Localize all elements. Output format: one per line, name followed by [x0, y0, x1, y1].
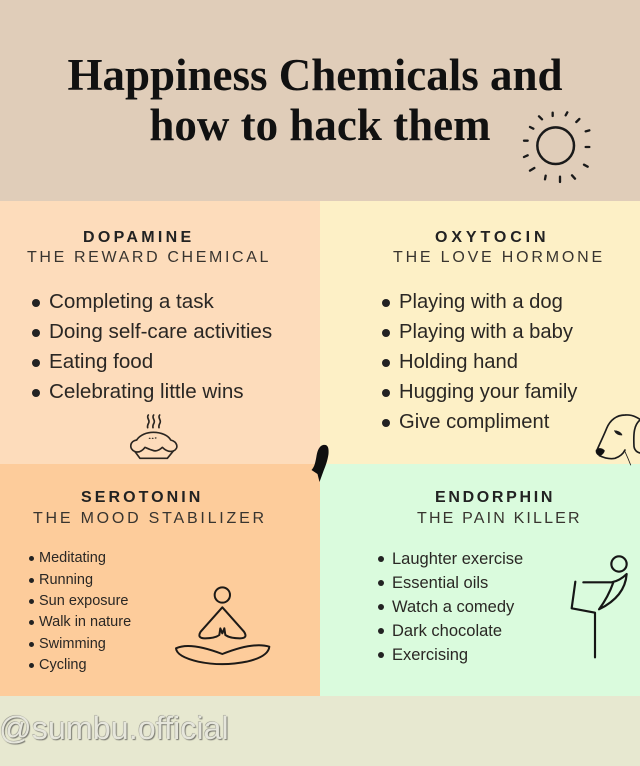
footer band — [0, 696, 640, 766]
watermark: @sumbu.official — [0, 710, 229, 746]
list: oxytocin: Playing with a dog — [399, 291, 563, 313]
list: oxytocin: Hugging your family — [399, 381, 577, 403]
list: oxytocin: Playing with a baby — [399, 321, 573, 343]
list: endorphin: Watch a comedy — [392, 598, 514, 616]
list: serotonin: Meditating — [39, 550, 106, 566]
list: serotonin: Sun exposure — [39, 593, 128, 609]
list: serotonin: Swimming — [39, 636, 106, 652]
list: endorphin: Dark chocolate — [392, 622, 502, 640]
list: serotonin: Cycling — [39, 657, 87, 673]
panel: serotonin — [0, 464, 320, 696]
list: oxytocin: Holding hand — [399, 351, 518, 373]
panel: dopamine — [0, 201, 320, 464]
list: endorphin: Laughter exercise — [392, 550, 523, 568]
panel: endorphin — [320, 464, 640, 696]
icon: dog — [596, 414, 640, 466]
list: serotonin — [29, 550, 131, 673]
icon: pie — [130, 414, 178, 460]
list: endorphin — [378, 550, 523, 664]
icon: meditation — [175, 586, 270, 666]
subheading: serotonin: THE MOOD STABILIZER — [33, 510, 267, 527]
list: dopamine: Eating food — [49, 350, 153, 373]
list: dopamine — [32, 290, 272, 403]
title — [67, 50, 563, 150]
list: dopamine: Celebrating little wins — [49, 380, 244, 403]
heading: serotonin: SEROTONIN — [81, 489, 203, 506]
panel: oxytocin — [320, 201, 640, 464]
icon: sun — [522, 111, 590, 184]
list: dopamine: Doing self-care activities — [49, 320, 272, 343]
list: oxytocin: Give compliment — [399, 411, 549, 433]
header band — [0, 0, 640, 201]
list: oxytocin — [382, 291, 578, 433]
heading: dopamine: DOPAMINE — [83, 229, 194, 246]
title: how to hack them — [149, 100, 491, 150]
subheading: dopamine: THE REWARD CHEMICAL — [27, 249, 271, 266]
icon: yoga pose — [570, 555, 628, 658]
heading: endorphin: ENDORPHIN — [435, 489, 555, 506]
list: endorphin: Exercising — [392, 646, 468, 664]
subheading: oxytocin: THE LOVE HORMONE — [393, 249, 605, 266]
icon: black bird silhouette — [312, 444, 329, 482]
list: endorphin: Essential oils — [392, 574, 488, 592]
list: serotonin: Walk in nature — [39, 614, 131, 630]
title: Happiness Chemicals and — [67, 50, 563, 100]
list: serotonin: Running — [39, 572, 93, 588]
list: dopamine: Completing a task — [49, 290, 214, 313]
heading: oxytocin: OXYTOCIN — [435, 229, 549, 246]
subheading: endorphin: THE PAIN KILLER — [417, 510, 582, 527]
